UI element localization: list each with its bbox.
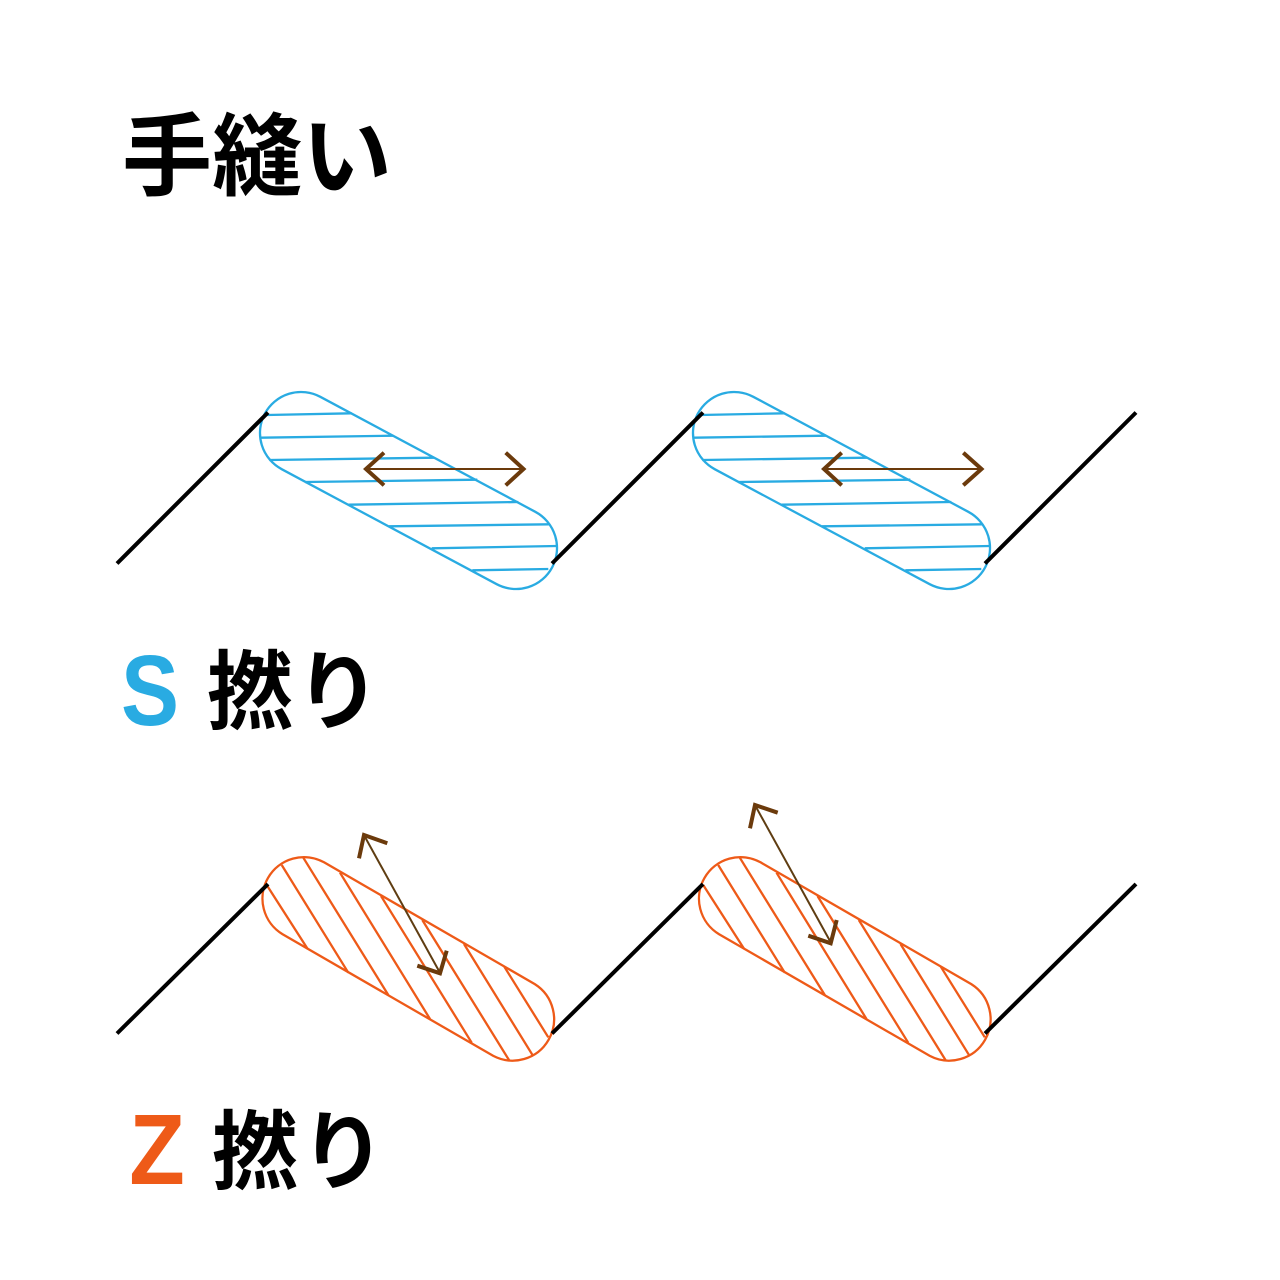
arrow: S left double-headed [366, 453, 524, 485]
diagram: S-twist stitches [117, 392, 1136, 589]
arrow: S right double-headed [824, 453, 982, 485]
stitch line: Z row segments [117, 884, 1136, 1034]
thread capsule: Z right [699, 857, 991, 1061]
S-twist label: 撚り [207, 622, 383, 747]
diagram: Z-twist stitches [117, 805, 1136, 1061]
thread capsule: Z left [262, 857, 554, 1061]
arrow: Z left double-headed [359, 835, 447, 973]
S-twist label [121, 622, 383, 747]
thread capsule: S right [693, 392, 990, 589]
S-twist label: S [121, 634, 179, 746]
Z-twist label: Z [129, 1094, 185, 1206]
Z-twist label: 撚り [212, 1082, 388, 1207]
Z-twist label [129, 1082, 388, 1207]
thread capsule: S left [260, 392, 557, 589]
stitch line: S row segments [117, 412, 1136, 564]
arrow: Z right double-headed [750, 805, 837, 943]
title: 手縫い [122, 84, 392, 214]
